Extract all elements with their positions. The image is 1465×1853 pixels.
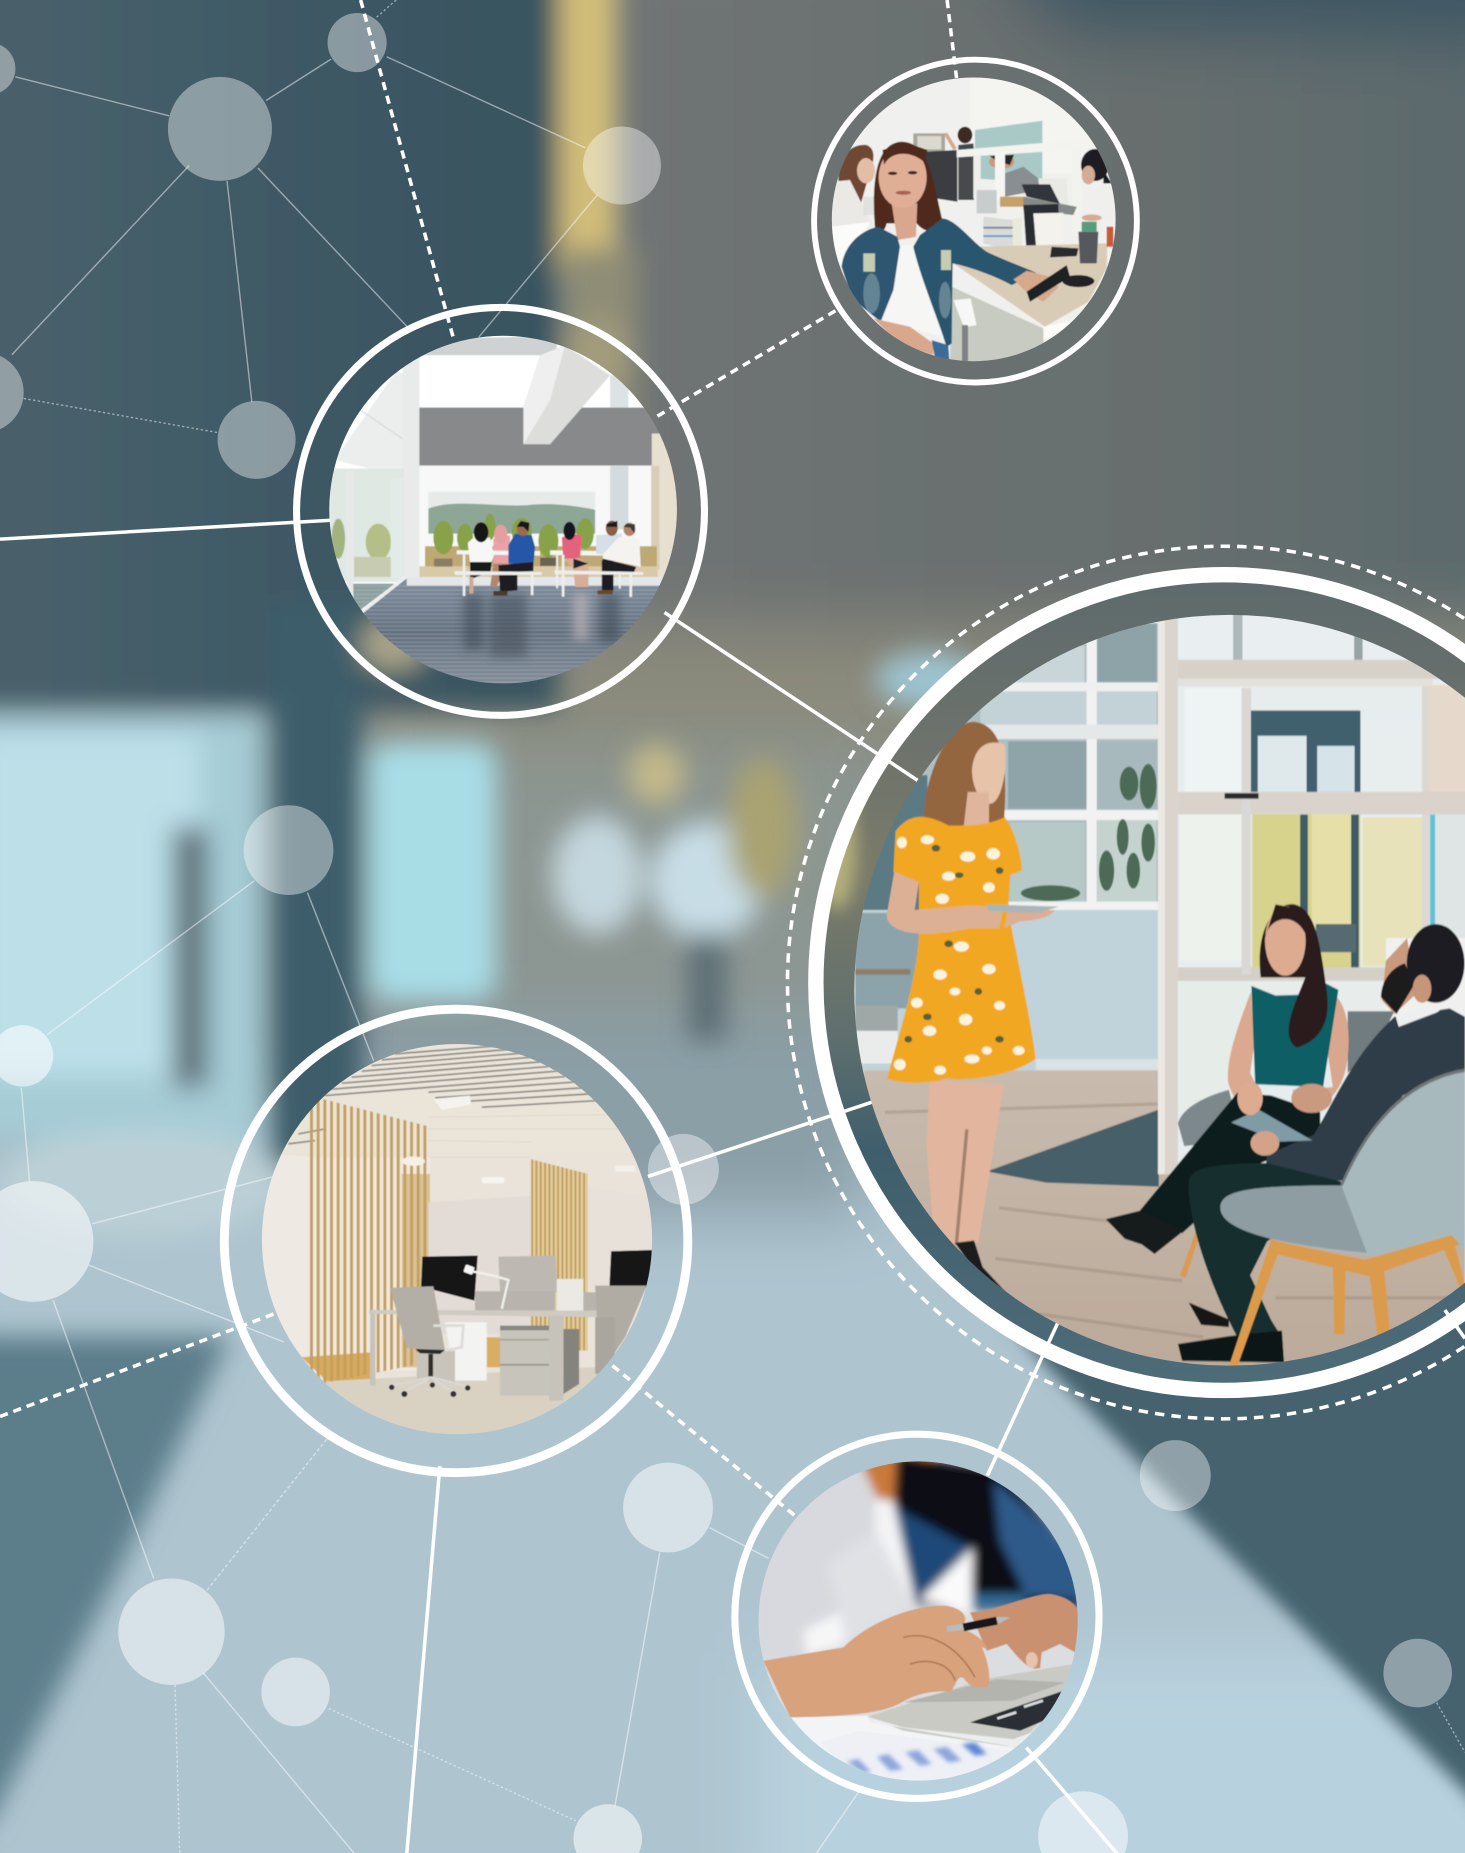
ring: large meeting photo bbox=[816, 575, 1465, 1390]
ring: laptop photo bbox=[735, 1434, 1099, 1798]
dashed ring: large meeting photo bbox=[787, 546, 1465, 1419]
photo: woman at open-plan desk bbox=[827, 73, 1120, 367]
network: bold solid connectors bbox=[0, 520, 1465, 1853]
seated woman bbox=[1106, 904, 1394, 1278]
ring: top-right photo bbox=[814, 60, 1137, 382]
ring: terrace photo bbox=[297, 307, 704, 715]
photo: office interior with gold slats bbox=[258, 1041, 658, 1441]
left window grid bbox=[855, 618, 1159, 911]
ring: office interior photo bbox=[224, 1009, 688, 1473]
seated man with chair bbox=[1178, 924, 1465, 1366]
photo: woman presenting to seated colleagues bbox=[854, 614, 1465, 1366]
photo: terrace meeting bbox=[327, 334, 680, 687]
standing woman in yellow dress bbox=[887, 722, 1059, 1292]
network: dashed connectors bbox=[0, 0, 957, 1519]
annulus behind large photo bbox=[816, 575, 1465, 1390]
photo: hands on laptop bbox=[753, 1454, 1087, 1791]
